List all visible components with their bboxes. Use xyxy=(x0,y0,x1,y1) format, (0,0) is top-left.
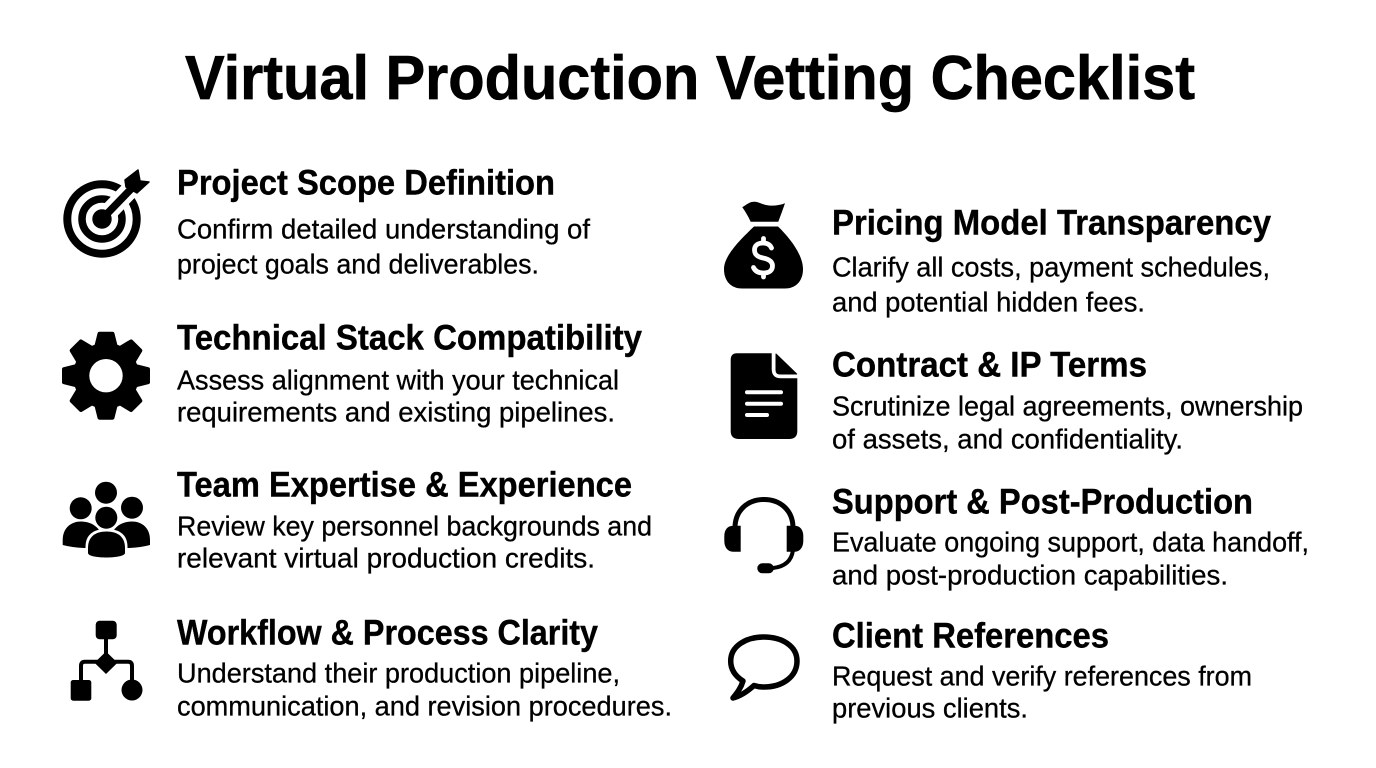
description: Review key personnel backgrounds and xyxy=(177,510,652,541)
title: Virtual Production Vetting Checklist xyxy=(185,44,1195,113)
description xyxy=(832,660,1252,723)
panel: client references xyxy=(731,616,1252,723)
icon: target with arrow xyxy=(67,170,149,254)
panel: pricing model transparency xyxy=(724,202,1271,317)
description: Request and verify references from xyxy=(832,660,1252,691)
description xyxy=(832,526,1309,590)
heading: Support & Post-Production xyxy=(832,482,1253,521)
description: and potential hidden fees. xyxy=(832,286,1145,317)
description: project goals and deliverables. xyxy=(177,248,539,279)
description: Understand their production pipeline, xyxy=(177,657,620,688)
description: previous clients. xyxy=(832,692,1028,723)
icon: speech bubble xyxy=(731,637,797,698)
description: of assets, and confidentiality. xyxy=(832,423,1183,454)
heading: Pricing Model Transparency xyxy=(832,203,1271,242)
heading: Technical Stack Compatibility xyxy=(177,318,642,357)
description: relevant virtual production credits. xyxy=(177,542,595,573)
description xyxy=(177,213,590,279)
heading: Project Scope Definition xyxy=(177,163,555,202)
description: Assess alignment with your technical xyxy=(177,364,619,395)
icon: money bag xyxy=(724,202,803,288)
description: Evaluate ongoing support, data handoff, xyxy=(832,526,1309,557)
heading: Contract & IP Terms xyxy=(832,345,1147,384)
description: communication, and revision procedures. xyxy=(177,690,672,721)
panel: support and post-production xyxy=(724,482,1309,590)
panel: workflow and process clarity xyxy=(71,613,672,721)
description: and post-production capabilities. xyxy=(832,559,1228,590)
description xyxy=(832,251,1270,317)
description xyxy=(177,657,672,721)
description: requirements and existing pipelines. xyxy=(177,396,615,427)
description xyxy=(832,390,1303,454)
icon: document xyxy=(731,353,797,439)
panel: team expertise and experience xyxy=(63,465,652,573)
icon: headset xyxy=(724,500,803,573)
icon: group of people xyxy=(63,482,150,558)
icon: workflow diagram xyxy=(71,621,142,701)
heading: Team Expertise & Experience xyxy=(177,465,632,504)
description: Clarify all costs, payment schedules, xyxy=(832,251,1270,282)
panel: technical stack compatibility xyxy=(64,318,642,427)
panel: contract and IP terms xyxy=(731,345,1303,454)
description xyxy=(177,364,619,427)
heading: Client References xyxy=(832,616,1109,655)
description: Scrutinize legal agreements, ownership xyxy=(832,390,1303,421)
heading: Workflow & Process Clarity xyxy=(177,613,598,652)
description xyxy=(177,510,652,573)
icon: gear xyxy=(64,334,148,418)
description: Confirm detailed understanding of xyxy=(177,213,590,244)
panel: project scope definition xyxy=(67,163,590,279)
